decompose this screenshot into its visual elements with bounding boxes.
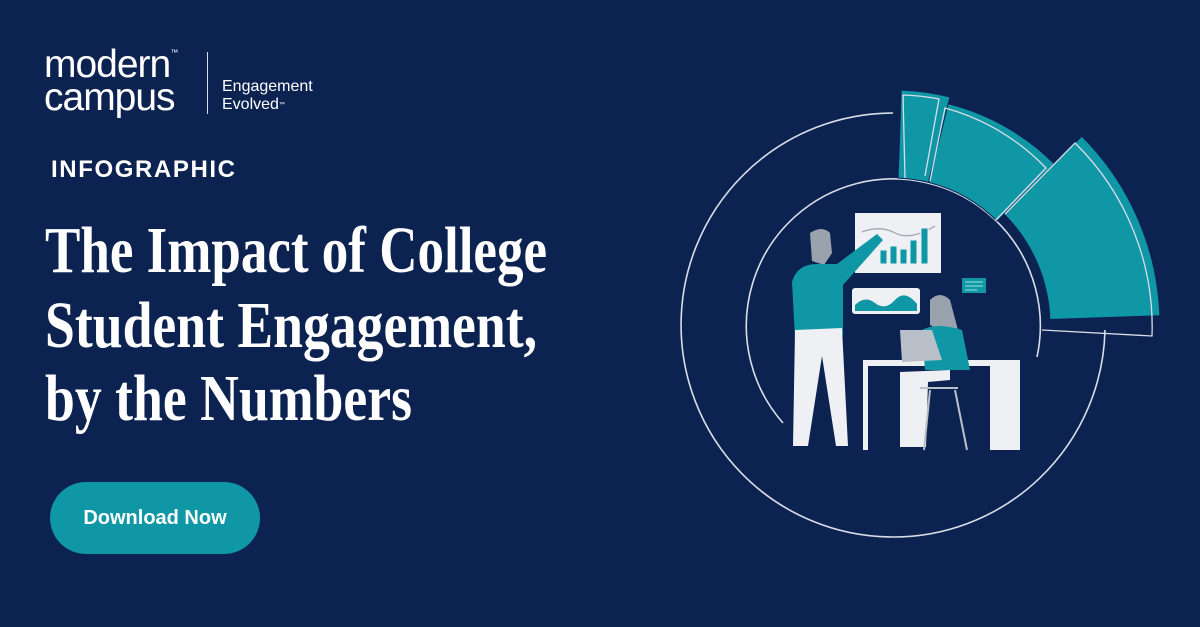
woman figure (900, 295, 970, 450)
outer ring (681, 113, 1105, 537)
small chat bubble (962, 278, 986, 293)
board with chart (855, 213, 941, 273)
title (45, 214, 547, 435)
title: Student Engagement, (45, 289, 537, 362)
button: Download Now (50, 482, 260, 554)
logo wordmark: modern™ (44, 43, 177, 86)
wedge highlight lines (903, 95, 1152, 336)
button: Download Now: Download Now (83, 507, 227, 529)
logo divider and tagline: Engagement (222, 78, 313, 95)
speech bubble chart (852, 288, 920, 314)
title: The Impact of College (45, 214, 547, 287)
chart wedges (898, 90, 1160, 319)
desk (863, 360, 1020, 450)
man figure (792, 229, 883, 446)
logo divider and tagline (207, 52, 347, 114)
logo wordmark: campus (44, 76, 175, 119)
eyebrow label: INFOGRAPHIC (51, 156, 237, 183)
title: by the Numbers (45, 362, 412, 435)
logo wordmark (44, 43, 178, 119)
logo (44, 43, 313, 119)
logo divider and tagline: Evolved™ (222, 96, 285, 113)
